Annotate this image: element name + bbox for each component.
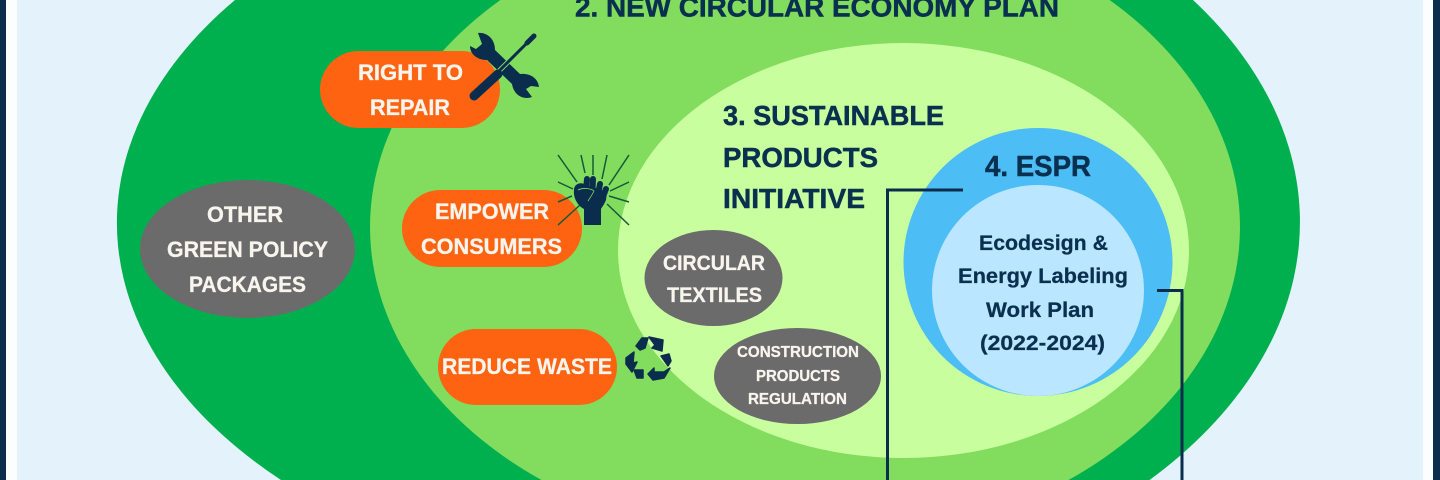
pill: right to repair: REPAIR	[370, 95, 450, 120]
bubble: circular textiles: CIRCULAR	[663, 252, 765, 275]
bubble: other green policy packages: PACKAGES	[189, 272, 306, 297]
circle 4: ESPR	[904, 128, 1172, 396]
circle 2: new circular economy plan	[370, 0, 1240, 480]
icon: wrench and screwdriver	[470, 33, 539, 98]
circle 5: work plan	[932, 185, 1144, 396]
connector: ESPR down	[888, 190, 963, 480]
icon: recycle	[626, 337, 671, 380]
bubble: construction products regulation: PRODUCTS	[756, 368, 840, 385]
bubble: circular textiles	[644, 230, 782, 326]
text: ecodesign work plan: Work Plan	[986, 299, 1094, 322]
heading: ESPR: 4. ESPR	[985, 151, 1091, 183]
bubble: other green policy packages	[140, 180, 355, 318]
heading: sustainable products initiative: 3. SUSTAINABLE	[723, 100, 944, 131]
bubble: construction products regulation: CONSTRUCTION	[737, 344, 859, 361]
pill: empower consumers	[402, 190, 582, 267]
text: ecodesign work plan	[958, 232, 1128, 355]
text: ecodesign work plan: Ecodesign &	[979, 232, 1108, 255]
bubble: construction products regulation	[714, 328, 881, 424]
frame left	[0, 0, 17, 480]
frame right	[1423, 0, 1440, 480]
bubble: circular textiles: TEXTILES	[667, 284, 762, 307]
bubble: other green policy packages: OTHER	[207, 202, 283, 227]
pill: right to repair	[320, 51, 500, 128]
text: ecodesign work plan: (2022-2024)	[980, 332, 1105, 355]
pill: reduce waste	[438, 329, 617, 405]
connector: work plan down	[1157, 290, 1182, 480]
heading: sustainable products initiative	[723, 100, 944, 214]
heading: sustainable products initiative: INITIATIVE	[723, 183, 865, 214]
heading: sustainable products initiative: PRODUCTS	[723, 142, 878, 173]
bubble: other green policy packages: GREEN POLICY	[167, 237, 328, 262]
pill: empower consumers: CONSUMERS	[421, 234, 562, 259]
pill: right to repair: RIGHT TO	[358, 60, 463, 85]
icon: raised fist	[558, 155, 629, 225]
bubble: construction products regulation: REGULATION	[748, 391, 847, 408]
pill: empower consumers: EMPOWER	[435, 199, 549, 224]
circle 3: sustainable products initiative	[618, 43, 1189, 458]
text: ecodesign work plan: Energy Labeling	[958, 265, 1128, 288]
pill: reduce waste: REDUCE WASTE	[442, 354, 612, 379]
